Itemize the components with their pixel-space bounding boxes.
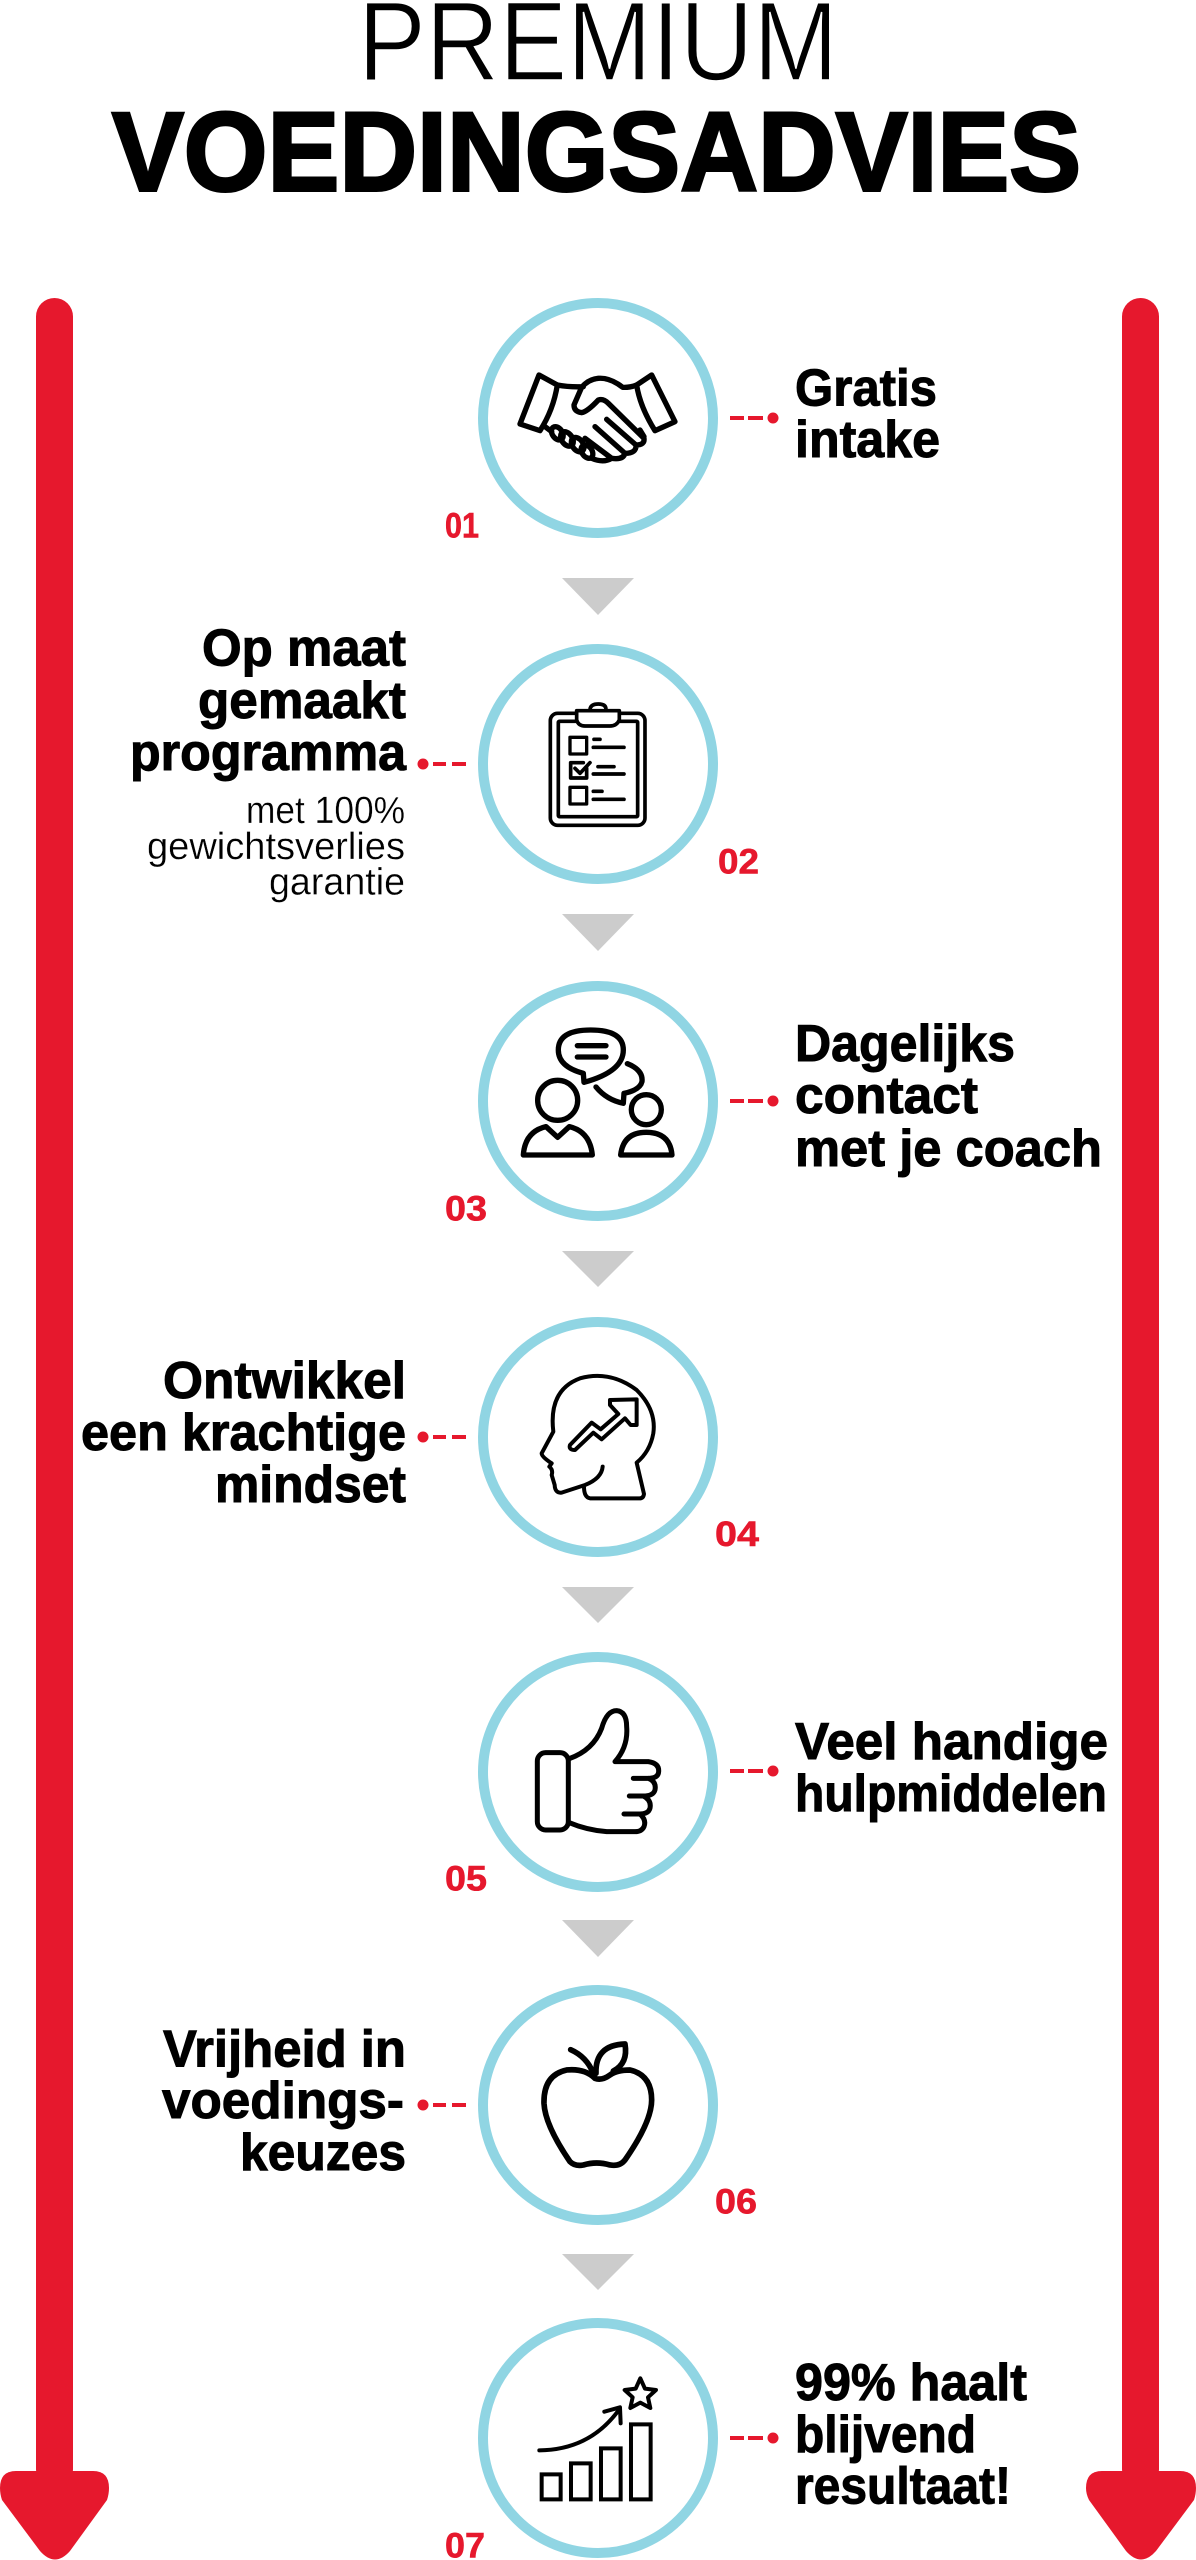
label 01: intake <box>795 411 940 469</box>
icon: head with rising arrow <box>542 1376 654 1498</box>
triangle 5 <box>562 1920 634 1957</box>
label 04: een krachtige <box>81 1404 406 1462</box>
icon: handshake <box>520 375 675 461</box>
triangle 2 <box>562 914 634 951</box>
connector 02 <box>418 758 466 770</box>
number 01: 01 <box>445 506 479 546</box>
label 06: keuzes <box>240 2124 406 2182</box>
label 06 <box>162 2020 406 2182</box>
label 04 <box>81 1352 406 1514</box>
label 07: 99% haalt <box>795 2354 1027 2412</box>
step 05 <box>445 1657 1108 1898</box>
triangle 1 <box>562 578 634 615</box>
label 06: voedings- <box>162 2072 404 2130</box>
connector 05 <box>730 1766 778 1776</box>
step 04 <box>81 1322 760 1554</box>
label 03 <box>795 1015 1102 1178</box>
number 06: 06 <box>715 2182 757 2222</box>
label 05: hulpmiddelen <box>795 1765 1107 1823</box>
circle 03 <box>483 986 713 1216</box>
connector 06 <box>418 2100 466 2110</box>
icon: apple <box>544 2044 652 2165</box>
label 03: contact <box>795 1067 978 1125</box>
step 02 <box>130 620 759 904</box>
arrow: left red arrow <box>0 298 109 2560</box>
triangle 3 <box>562 1251 634 1287</box>
label 04: mindset <box>215 1456 406 1514</box>
label 02 <box>130 620 407 782</box>
circle 02 <box>483 649 713 879</box>
number 03: 03 <box>445 1190 487 1228</box>
connector 04 <box>418 1432 466 1442</box>
connector 01 <box>730 412 778 424</box>
label 02: gemaakt <box>198 672 406 730</box>
label 02: programma <box>130 724 407 782</box>
step 01 <box>445 303 940 546</box>
label 07: blijvend <box>795 2406 976 2464</box>
step 07 <box>445 2323 1027 2560</box>
circle 05 <box>483 1657 713 1887</box>
circle 01 <box>483 303 713 533</box>
arrow: right red arrow <box>1086 298 1196 2560</box>
label 03: Dagelijks <box>795 1015 1015 1073</box>
connector 07 <box>730 2432 778 2444</box>
number 04: 04 <box>715 1515 760 1554</box>
sublabel 02: garantie <box>269 862 405 904</box>
sublabel 02: gewichtsverlies <box>147 826 405 868</box>
title <box>112 0 1081 214</box>
step 03 <box>445 986 1102 1228</box>
icon: clipboard checklist <box>550 704 645 825</box>
label 07 <box>795 2354 1027 2516</box>
connector 03 <box>730 1096 778 1106</box>
sublabel 02 <box>147 790 405 904</box>
number 02: 02 <box>718 842 759 882</box>
icon: growth chart with star <box>539 2378 656 2499</box>
icon: thumbs up <box>537 1711 659 1832</box>
sublabel 02: met 100% <box>246 790 405 832</box>
label 05: Veel handige <box>795 1713 1108 1771</box>
triangle 4 <box>562 1587 634 1623</box>
label 02: Op maat <box>202 620 406 678</box>
circle 07 <box>483 2323 713 2553</box>
step 06 <box>162 1990 757 2222</box>
label 05 <box>795 1713 1108 1823</box>
icon: coach conversation <box>523 1030 672 1155</box>
circle 06 <box>483 1990 713 2220</box>
triangle 6 <box>562 2254 634 2290</box>
circle 04 <box>483 1322 713 1552</box>
title: VOEDINGSADVIES <box>112 90 1081 214</box>
label 03: met je coach <box>795 1120 1102 1178</box>
number 05: 05 <box>445 1860 487 1898</box>
label 07: resultaat! <box>795 2458 1011 2516</box>
label 01 <box>795 360 940 469</box>
label 06: Vrijheid in <box>163 2020 406 2078</box>
label 01: Gratis <box>795 360 937 418</box>
label 04: Ontwikkel <box>163 1352 406 1410</box>
